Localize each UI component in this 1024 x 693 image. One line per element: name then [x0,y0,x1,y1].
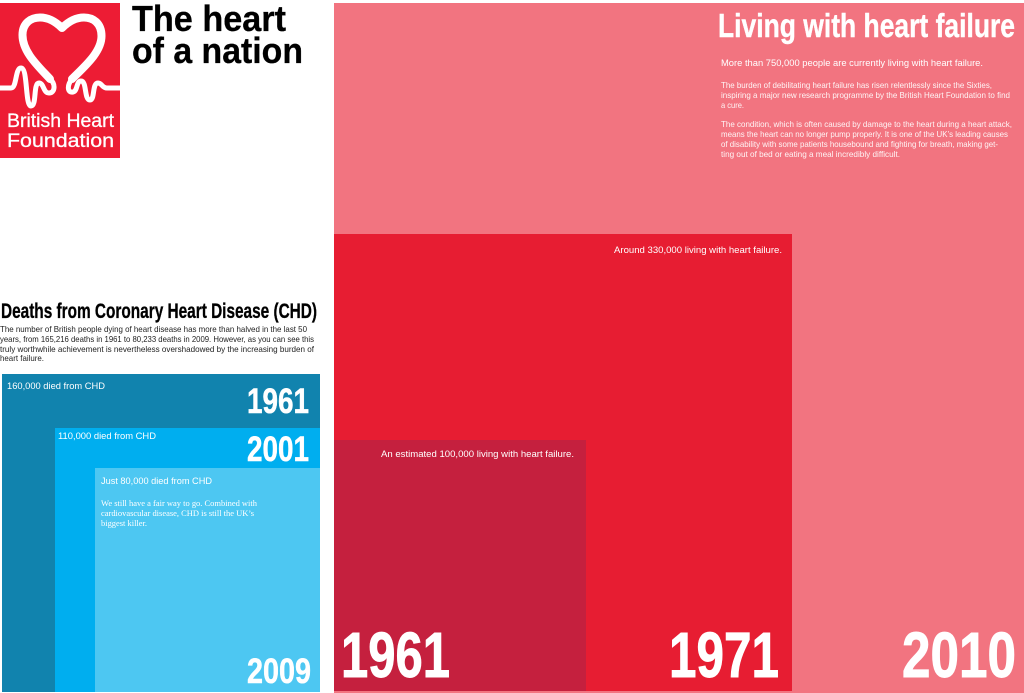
title: of a nation [132,30,303,71]
panel: CHD 2001 [55,428,320,692]
text block: CHD intro [0,325,315,363]
title [132,0,303,71]
panel: living with heart failure, 2010 [334,3,1024,693]
year: 1961: 1961 [341,619,450,691]
text block: burden: a cure. [721,101,744,110]
text block: condition: The condition, which is often caused by damage to the heart during a heart attack, [721,120,1012,129]
text block: still a way to go: biggest killer. [101,519,147,528]
logo wordmark: British Heart [7,111,115,132]
panel: 1971 [334,234,792,691]
text block: CHD intro: heart failure. [0,354,44,363]
lead text: More than 750,000 people are currently living with heart failure. [721,58,983,69]
text block: still a way to go [101,499,257,528]
icon: heart with pulse line [0,18,122,106]
panel: 1961 [334,440,586,691]
label: 100,000: An estimated 100,000 living with heart failure. [381,449,574,460]
label: 80,000: Just 80,000 died from CHD [101,476,212,487]
text block: CHD intro: The number of British people dying of heart disease has more than halved in the last 50 [0,325,307,334]
text block: condition: of disability with some patients housebound and fighting for breath, making get- [721,140,998,149]
text block: burden: The burden of debilitating heart failure has risen relentlessly since the Sixties, [721,81,992,90]
logo: British Heart Foundation [0,3,122,158]
panel: CHD 1961 [2,374,320,692]
year: 1971: 1971 [669,619,779,691]
label: 110,000: 110,000 died from CHD [58,431,156,442]
label: 160,000: 160,000 died from CHD [7,381,105,392]
text block: burden [721,81,1010,110]
text block: still a way to go: We still have a fair way to go. Combined with [101,499,257,508]
text block: CHD intro: years, from 165,216 deaths in 1961 to 80,233 deaths in 2009. However, as you can see this [0,335,314,344]
text block: condition: ting out of bed or eating a meal incredibly difficult. [721,150,900,159]
text block: condition: means the heart can no longer pump properly. It is one of the UK’s leading causes [721,130,1008,139]
logo wordmark: Foundation [7,131,114,152]
panel: CHD 2009 [95,468,320,692]
heading: deaths from CHD: Deaths from Coronary Heart Disease (CHD) [1,300,317,323]
year: 2001: 2001 [247,430,309,469]
label: 330,000: Around 330,000 living with heart failure. [614,245,782,256]
logo wordmark [7,111,115,152]
text block: CHD intro: truly worthwhile achievement is nevertheless overshadowed by the increasing burden of [0,345,315,354]
year: 2009: 2009 [247,652,311,691]
text block: condition [721,120,1012,159]
text block: burden: inspiring a major new research programme by the British Heart Foundation to find [721,91,1010,100]
text block: still a way to go: cardiovascular disease, CHD is still the UK’s [101,509,254,518]
year: 1961: 1961 [247,382,309,421]
